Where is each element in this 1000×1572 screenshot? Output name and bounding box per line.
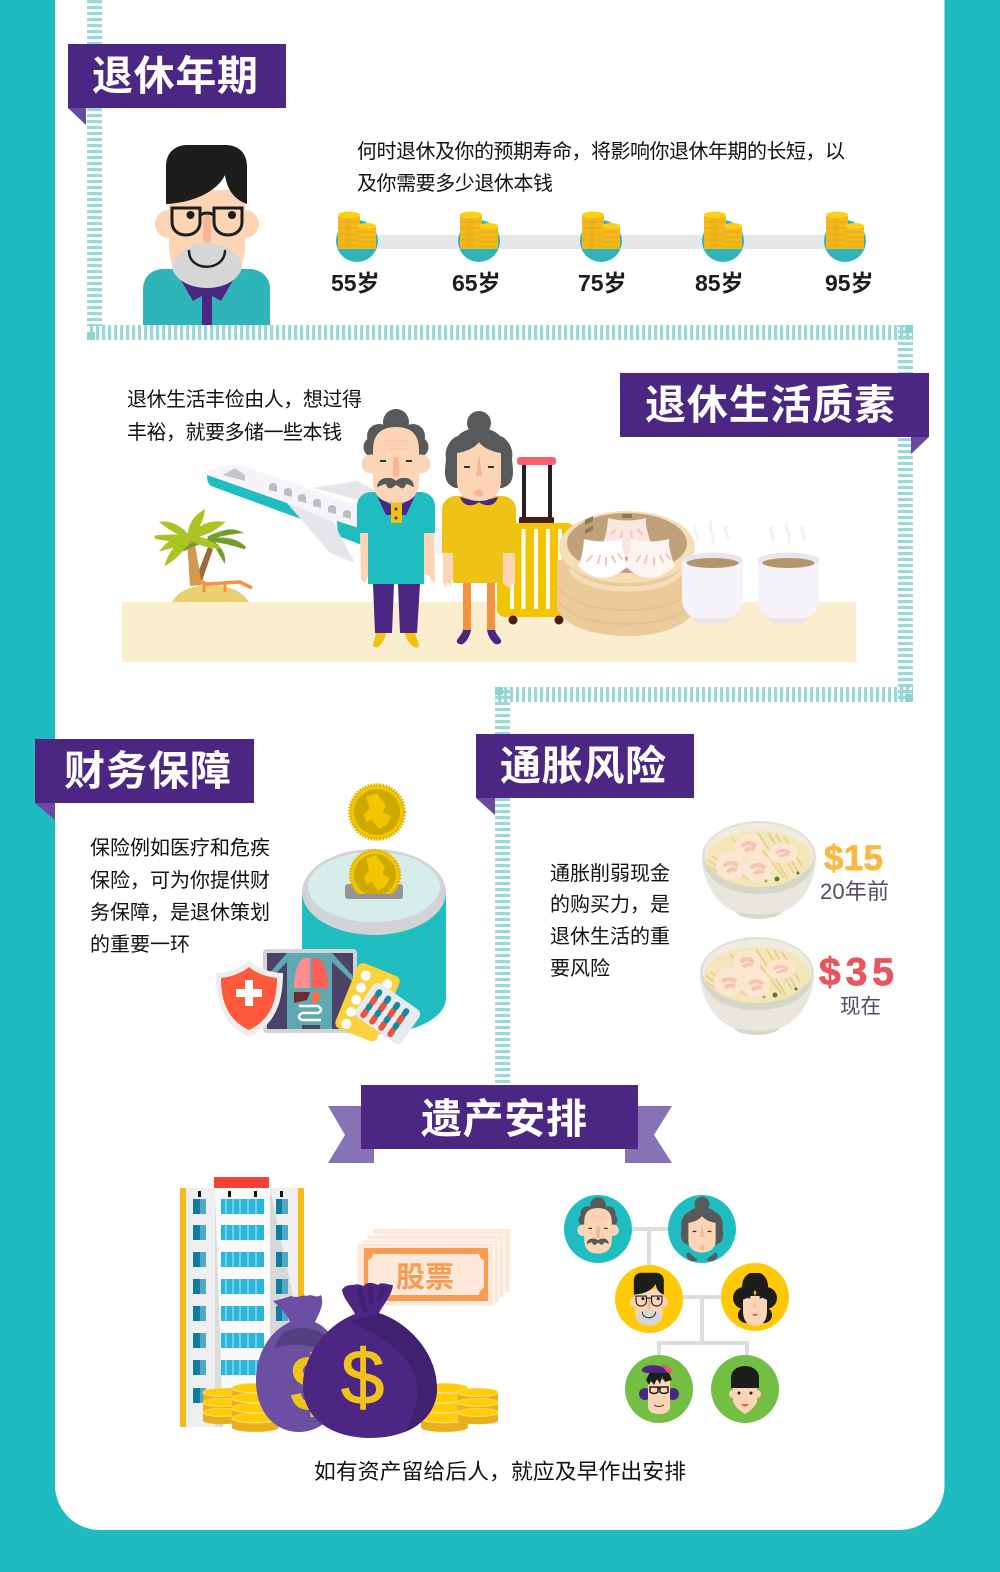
banner: 通胀风险: 通胀风险 xyxy=(500,743,666,789)
banner: 退休年期 xyxy=(68,44,286,125)
text: legacy: 如有资产留给后人，就应及早作出安排 xyxy=(314,1459,686,1484)
icon: gold coins xyxy=(203,1383,498,1432)
panel: inflation risk xyxy=(476,734,894,1035)
icon: grandfather xyxy=(357,409,435,648)
face: daughter xyxy=(729,1366,761,1414)
sand ground xyxy=(122,602,856,662)
panel: retirement duration xyxy=(68,44,874,325)
banner: 遗产安排 xyxy=(328,1085,672,1163)
icon: palm island xyxy=(155,512,252,602)
timeline: retirement ages: 55岁 xyxy=(331,270,380,296)
icon: front money bag: $ xyxy=(341,1333,384,1421)
price: 35: $35 xyxy=(819,951,894,994)
icon: stock certificates: 股票 xyxy=(396,1262,454,1294)
icon: rear money bag xyxy=(256,1295,343,1432)
icon: dim sum steamer xyxy=(557,511,695,636)
text: insurance: 务保障，是退休策划 xyxy=(90,901,270,924)
panel: retirement quality of life xyxy=(122,373,929,662)
banner: 遗产安排: 遗产安排 xyxy=(421,1096,587,1142)
banner: 财务保障: 财务保障 xyxy=(64,748,231,794)
face: son xyxy=(639,1365,679,1414)
icon: front money bag xyxy=(303,1283,437,1438)
text: insurance: 的重要一环 xyxy=(90,933,190,956)
timeline: retirement ages: 85岁 xyxy=(695,270,744,296)
icon: grandmother xyxy=(442,411,516,644)
chart: family tree xyxy=(564,1195,789,1423)
icon: coin falling xyxy=(350,784,404,840)
panel: financial protection xyxy=(35,739,446,1046)
text: inflation: 退休生活的重 xyxy=(550,925,670,948)
icon: savings tin xyxy=(302,849,446,1034)
text: lifestyle: 丰裕，就要多储一些本钱 xyxy=(127,421,342,444)
icon: man with glasses and beard xyxy=(143,145,270,325)
icon: suitcase xyxy=(497,457,575,624)
banner: 退休年期: 退休年期 xyxy=(92,53,258,99)
label: 20年前: 20年前 xyxy=(820,879,889,904)
banner: 通胀风险 xyxy=(476,734,694,815)
text: inflation: 的购买力，是 xyxy=(550,893,670,916)
text: intro to retirement length: 何时退休及你的预期寿命，将影响你退休年期的长短，以 xyxy=(357,140,845,163)
banner: 退休生活质素 xyxy=(620,373,929,454)
label: 现在: 现在 xyxy=(840,995,881,1018)
icon: noodle bowl then xyxy=(702,821,816,919)
timeline: retirement ages: 65岁 xyxy=(452,270,501,296)
banner: 退休生活质素: 退休生活质素 xyxy=(645,382,895,428)
face: mother xyxy=(733,1273,777,1326)
text: inflation: 通胀削弱现金 xyxy=(550,862,670,885)
icon: x-ray xyxy=(263,949,357,1033)
icon: rear money bag: $ xyxy=(290,1339,334,1428)
price: 15: $15 xyxy=(824,839,883,878)
icon: apartment building xyxy=(180,1177,304,1427)
text: inflation: 要风险 xyxy=(550,957,610,980)
text: insurance: 保险，可为你提供财 xyxy=(90,869,270,892)
timeline: retirement ages: 95岁 xyxy=(825,270,874,296)
icon: tea cups xyxy=(682,521,819,623)
text: lifestyle: 退休生活丰俭由人，想过得 xyxy=(127,388,362,411)
timeline: retirement ages xyxy=(331,212,874,296)
text: insurance: 保险例如医疗和危疾 xyxy=(90,836,270,860)
icon: noodle bowl now xyxy=(700,937,814,1035)
icon: stock certificates xyxy=(357,1229,510,1306)
icon: shield xyxy=(216,960,283,1037)
panel: estate planning xyxy=(180,1085,789,1484)
text: intro to retirement length: 及你需要多少退休本钱 xyxy=(357,172,553,195)
banner: 财务保障 xyxy=(35,739,254,820)
timeline: retirement ages: 75岁 xyxy=(578,270,627,296)
icon: pills xyxy=(333,961,422,1046)
icon: airplane xyxy=(207,465,445,563)
